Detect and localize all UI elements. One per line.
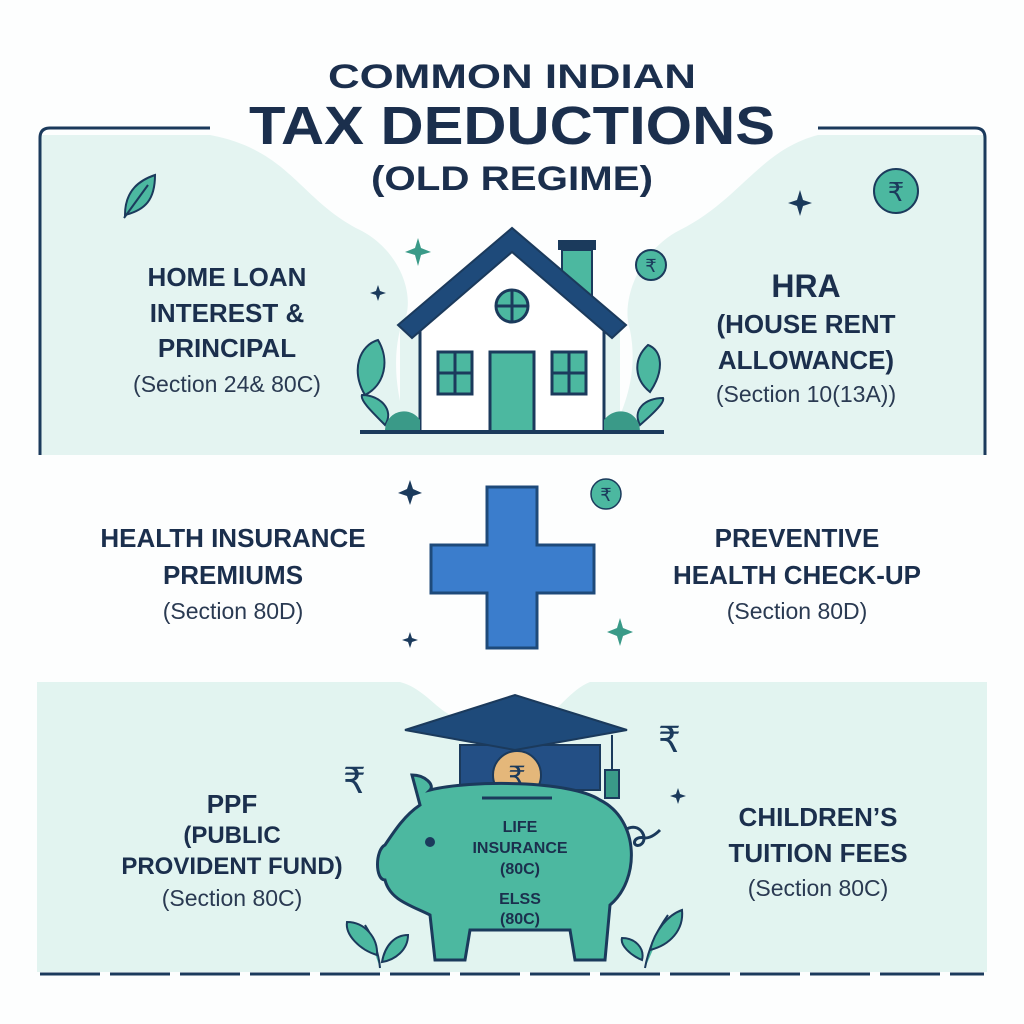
text: children's tuition [728, 802, 908, 901]
text: PPF [121, 789, 343, 911]
text: HRA: (Section 10(13A)) [716, 381, 896, 407]
text: home loan: INTEREST & [150, 298, 304, 328]
text: PPF: (Section 80C) [162, 885, 302, 911]
text: children's tuition: (Section 80C) [748, 875, 888, 901]
panel: top [40, 128, 985, 455]
icon: medical cross [431, 487, 594, 648]
icon: leaf top-left [124, 175, 155, 218]
icon: piggy bank with grad cap: LIFE [503, 819, 538, 836]
icon: rupee coin top-right [874, 169, 918, 213]
icon: sprout left [347, 922, 408, 968]
text: PPF: PPF [207, 789, 257, 819]
text: HRA: (HOUSE RENT [716, 309, 896, 339]
icon: house [358, 228, 664, 432]
title: (OLD REGIME) [371, 160, 653, 198]
text: HRA: HRA [771, 268, 841, 304]
icon: small rupee coin: ₹ [645, 256, 657, 276]
title: COMMON INDIAN [328, 58, 696, 96]
icon: rupee symbols bottom [343, 719, 686, 804]
text: health insurance: HEALTH INSURANCE [100, 523, 366, 553]
text: children's tuition: TUITION FEES [728, 838, 908, 868]
icon: sparkles top [370, 190, 812, 301]
title: TAX DEDUCTIONS [249, 96, 775, 156]
panel: bottom [37, 682, 987, 974]
text: health insurance: PREMIUMS [163, 560, 303, 590]
text: children's tuition: CHILDREN’S [739, 802, 897, 832]
icon: rupee coin top-right: ₹ [888, 177, 904, 207]
icon: rupee symbols bottom: ₹ [343, 760, 366, 801]
icon: rupee symbols bottom: ₹ [658, 719, 681, 760]
icon: piggy bank with grad cap: INSURANCE [472, 840, 568, 857]
text: preventive: (Section 80D) [727, 598, 867, 624]
icon: piggy bank with grad cap: (80C) [500, 861, 540, 878]
text: preventive [673, 523, 921, 624]
text: HRA [716, 268, 896, 407]
icon: sprout right [622, 910, 682, 968]
icon: piggy bank with grad cap [347, 695, 682, 968]
icon: rupee coin middle [591, 479, 621, 509]
icon: piggy bank with grad cap: ₹ [508, 761, 526, 792]
icon: piggy bank with grad cap: ELSS [499, 891, 541, 908]
icon: piggy bank with grad cap: (80C) [500, 911, 540, 928]
text: health insurance: (Section 80D) [163, 598, 303, 624]
icon: rupee coin middle: ₹ [600, 485, 612, 505]
text: health insurance [100, 523, 366, 624]
icon: small rupee coin [636, 250, 666, 280]
text: home loan: (Section 24& 80C) [133, 371, 321, 397]
icon: sparkles middle [398, 480, 633, 648]
text: home loan [133, 262, 321, 397]
text: PPF: PROVIDENT FUND) [121, 853, 343, 880]
text: home loan: PRINCIPAL [158, 333, 296, 363]
text: PPF: (PUBLIC [183, 822, 281, 849]
title [249, 58, 775, 198]
text: preventive: PREVENTIVE [715, 523, 879, 553]
text: preventive: HEALTH CHECK-UP [673, 560, 921, 590]
text: HRA: ALLOWANCE) [718, 345, 894, 375]
text: home loan: HOME LOAN [148, 262, 306, 292]
